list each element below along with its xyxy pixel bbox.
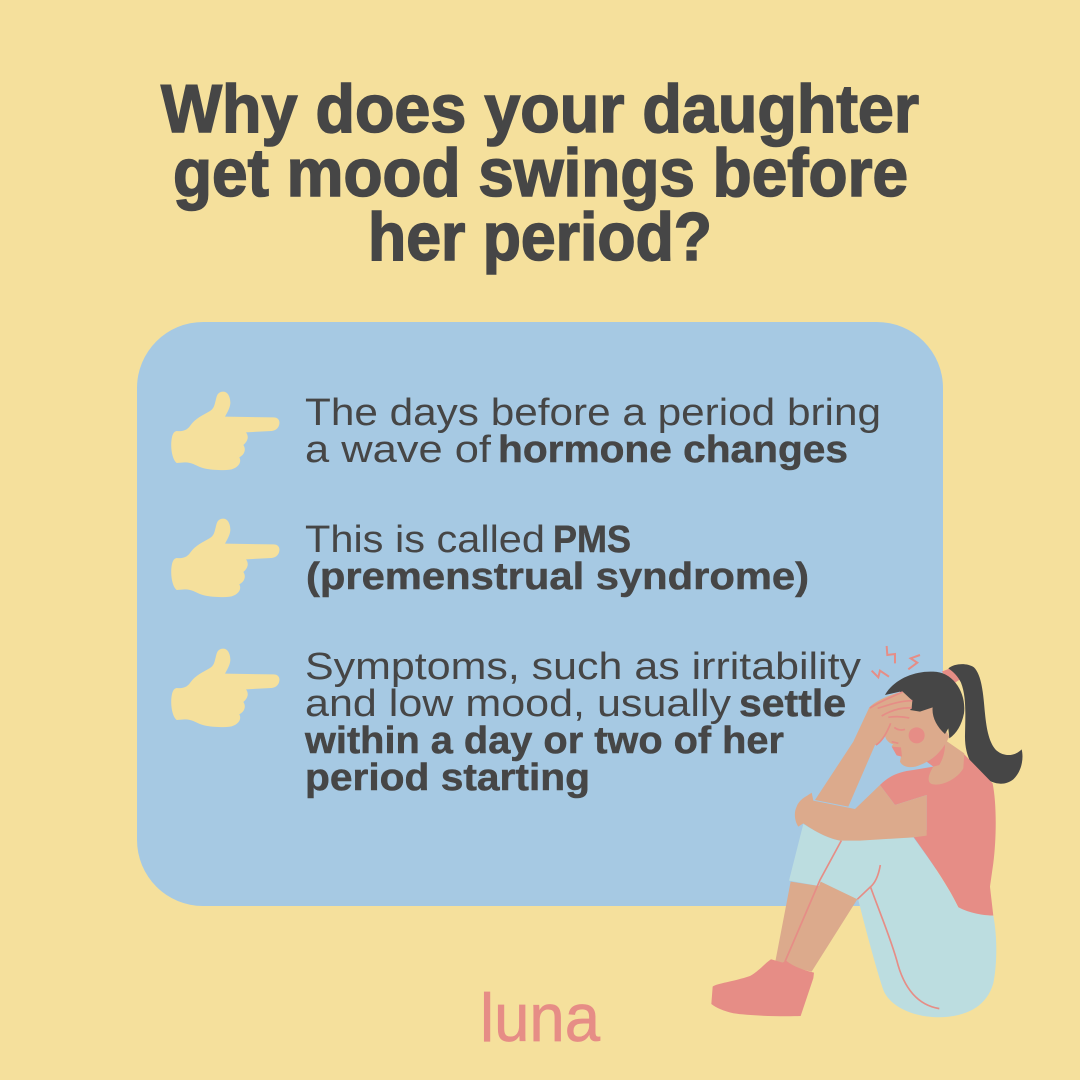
- icon: pointing hand 1: [171, 392, 279, 470]
- logo: luna: luna: [480, 980, 600, 1056]
- text block: hormone changes: The days before a period bring: [305, 392, 881, 434]
- shoe: [711, 959, 814, 1016]
- panel: blue information card: [137, 322, 943, 906]
- folded arm: [795, 785, 927, 841]
- clothing seam lines: [785, 841, 939, 1009]
- text block: PMS: This is called: [305, 519, 545, 561]
- finger and face lines: [870, 692, 912, 745]
- pain marks: [872, 646, 920, 677]
- cheek: [909, 727, 925, 743]
- text block: symptoms: period starting: [305, 757, 590, 799]
- mouth: [892, 747, 902, 757]
- face: [885, 705, 949, 767]
- raised arm and hand: [815, 692, 912, 807]
- text block: hormone changes: [305, 392, 881, 471]
- hair: [885, 672, 964, 738]
- icon: pointing hand 3: [171, 649, 279, 727]
- text block: symptoms: [304, 646, 861, 799]
- text block: symptoms: settle: [739, 683, 846, 725]
- title: Why does your daughter: [161, 71, 919, 147]
- neck: [929, 740, 964, 785]
- text block: PMS: (premenstrual syndrome): [306, 556, 809, 598]
- text block: symptoms: Symptoms, such as irritability: [305, 646, 861, 688]
- title: get mood swings before: [173, 135, 908, 211]
- text block: PMS: [305, 519, 809, 598]
- text block: hormone changes: hormone changes: [498, 429, 848, 471]
- shirt: [880, 753, 996, 916]
- title: [161, 71, 919, 275]
- text block: symptoms: and low mood, usually: [305, 683, 731, 725]
- text block: hormone changes: a wave of: [305, 429, 491, 471]
- illustration: girl holding her head: [711, 646, 1022, 1017]
- legs: [775, 882, 857, 972]
- title: her period?: [368, 199, 712, 275]
- text block: symptoms: within a day or two of her: [304, 720, 784, 762]
- hair tie: [942, 667, 960, 683]
- icon: pointing hand 2: [171, 519, 279, 597]
- text block: PMS: PMS: [553, 519, 631, 561]
- pants: [789, 824, 996, 1017]
- ponytail: [948, 664, 1022, 784]
